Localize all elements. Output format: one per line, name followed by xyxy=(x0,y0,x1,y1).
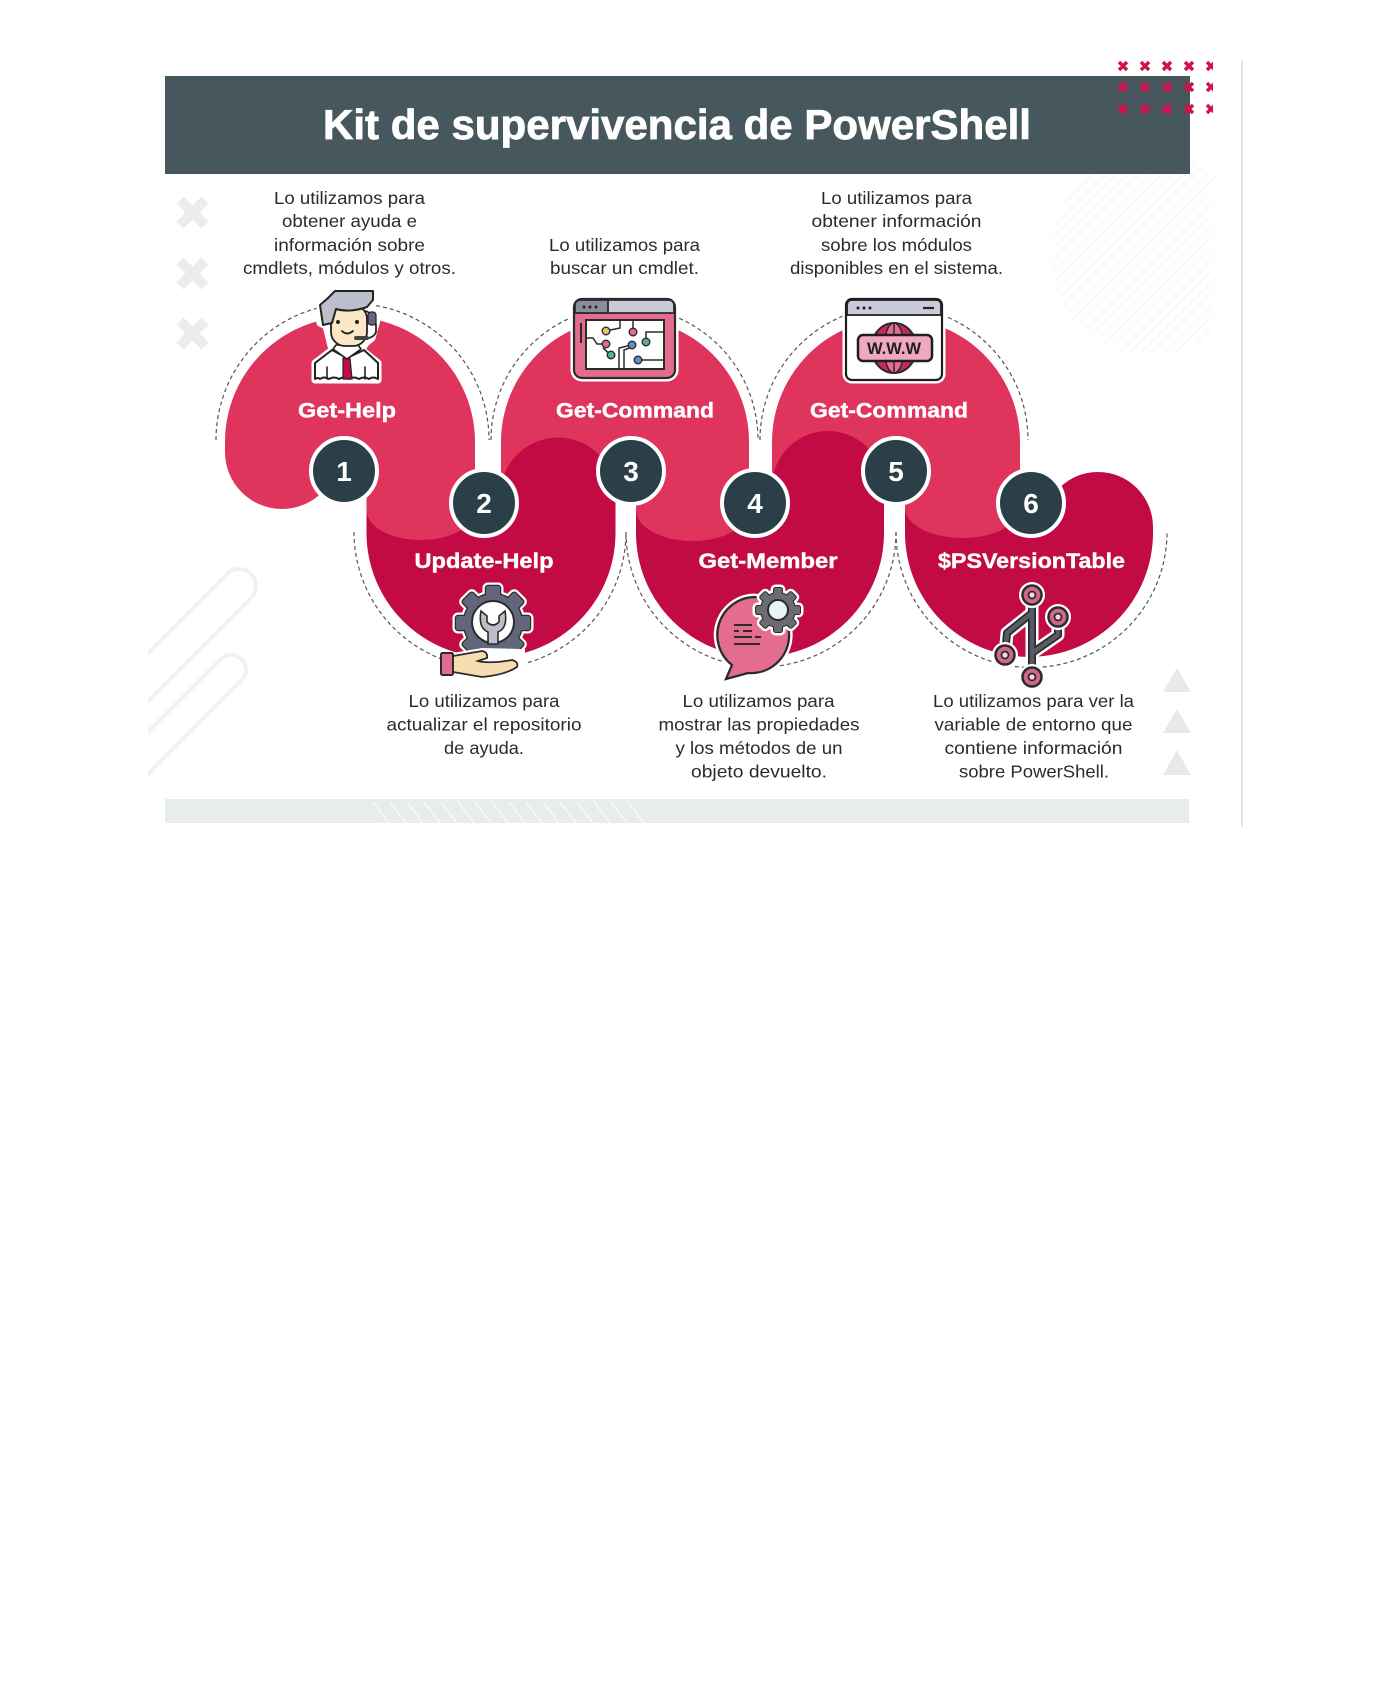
title banner xyxy=(165,76,1190,174)
label: Get-Member: Get-Member xyxy=(698,550,838,573)
text: modules description: Lo utilizamos para xyxy=(821,188,972,208)
text: $PSVersionTable description: Lo utilizamos para ver la xyxy=(933,691,1134,711)
text: Update-Help description: actualizar el repositorio xyxy=(386,714,582,734)
number badge 6 xyxy=(998,470,1064,536)
label: Get-Command 3: Get-Command xyxy=(556,400,714,422)
hatched circle decoration xyxy=(1050,162,1213,355)
label: Get-Command 5: Get-Command xyxy=(810,400,968,422)
text: Update-Help description: de ayuda. xyxy=(444,738,524,758)
text: $PSVersionTable description: variable de entorno que xyxy=(934,714,1132,734)
red cross grid decoration xyxy=(1119,62,1215,113)
number badge 5 xyxy=(863,438,929,504)
ribbon: light arches xyxy=(225,317,1020,509)
text: Get-Member description: objeto devuelto. xyxy=(691,762,827,782)
number badge 1 xyxy=(311,438,377,504)
text: Update-Help description: Lo utilizamos para xyxy=(408,691,560,711)
ribbon: dark arches xyxy=(366,431,1153,657)
ribbon: light lobes xyxy=(366,440,1020,541)
icon: speech bubble with gear xyxy=(717,588,800,679)
number badge 3: 3 xyxy=(623,456,639,487)
label: Get-Help: Get-Help xyxy=(298,400,396,422)
right page edge line xyxy=(1241,60,1243,827)
text: Get-Help description: Lo utilizamos para xyxy=(274,188,425,208)
text: modules description xyxy=(790,188,1003,278)
text: Get-Help description: obtener ayuda e xyxy=(282,211,417,231)
pill outline decorations xyxy=(148,567,258,776)
number badge 2 xyxy=(451,470,517,536)
label: Update-Help: Update-Help xyxy=(414,550,554,573)
text: $PSVersionTable description: sobre PowerShell. xyxy=(959,762,1109,782)
icon: branching connector xyxy=(996,586,1068,686)
label: $PSVersionTable: $PSVersionTable xyxy=(938,550,1125,573)
title: Kit de supervivencia de PowerShell xyxy=(323,101,1031,148)
text: Get-Member description: Lo utilizamos para xyxy=(682,691,835,711)
text: Get-Command description: buscar un cmdlet. xyxy=(550,258,699,278)
text: Get-Command description: Lo utilizamos para xyxy=(549,235,700,255)
number badge 4 xyxy=(722,470,788,536)
text: Get-Help description xyxy=(243,188,456,278)
text: $PSVersionTable description xyxy=(933,691,1134,782)
text: modules description: disponibles en el sistema. xyxy=(790,258,1003,278)
dashed outlines xyxy=(216,304,1167,668)
text: Update-Help description xyxy=(386,691,582,758)
infographic xyxy=(148,60,1243,827)
icon: gear and hand xyxy=(441,586,530,679)
number badge 6: 6 xyxy=(1023,488,1039,519)
text: modules description: sobre los módulos xyxy=(821,235,972,255)
number badge 1: 1 xyxy=(336,456,352,487)
text: Get-Command description xyxy=(549,235,700,278)
text: Get-Help description: cmdlets, módulos y otros. xyxy=(243,258,456,278)
text: $PSVersionTable description: contiene información xyxy=(944,738,1122,758)
text: Get-Member description: y los métodos de un xyxy=(676,738,842,758)
icon: www browser window: W.W.W xyxy=(867,339,922,358)
footer band xyxy=(165,799,1189,823)
number badge 3 xyxy=(598,438,664,504)
number badge 2: 2 xyxy=(476,488,492,519)
grey triangle decorations xyxy=(1163,668,1191,775)
icon: circuit window xyxy=(574,299,675,378)
icon: www browser window xyxy=(846,299,942,380)
text: Get-Member description xyxy=(658,691,860,782)
number badge 5: 5 xyxy=(888,456,904,487)
text: Get-Help description: información sobre xyxy=(274,235,425,255)
grey cross decorations xyxy=(180,200,205,346)
number badge 4: 4 xyxy=(747,488,763,519)
text: modules description: obtener información xyxy=(812,211,982,231)
icon: support agent xyxy=(315,290,378,380)
text: Get-Member description: mostrar las propiedades xyxy=(658,714,860,734)
